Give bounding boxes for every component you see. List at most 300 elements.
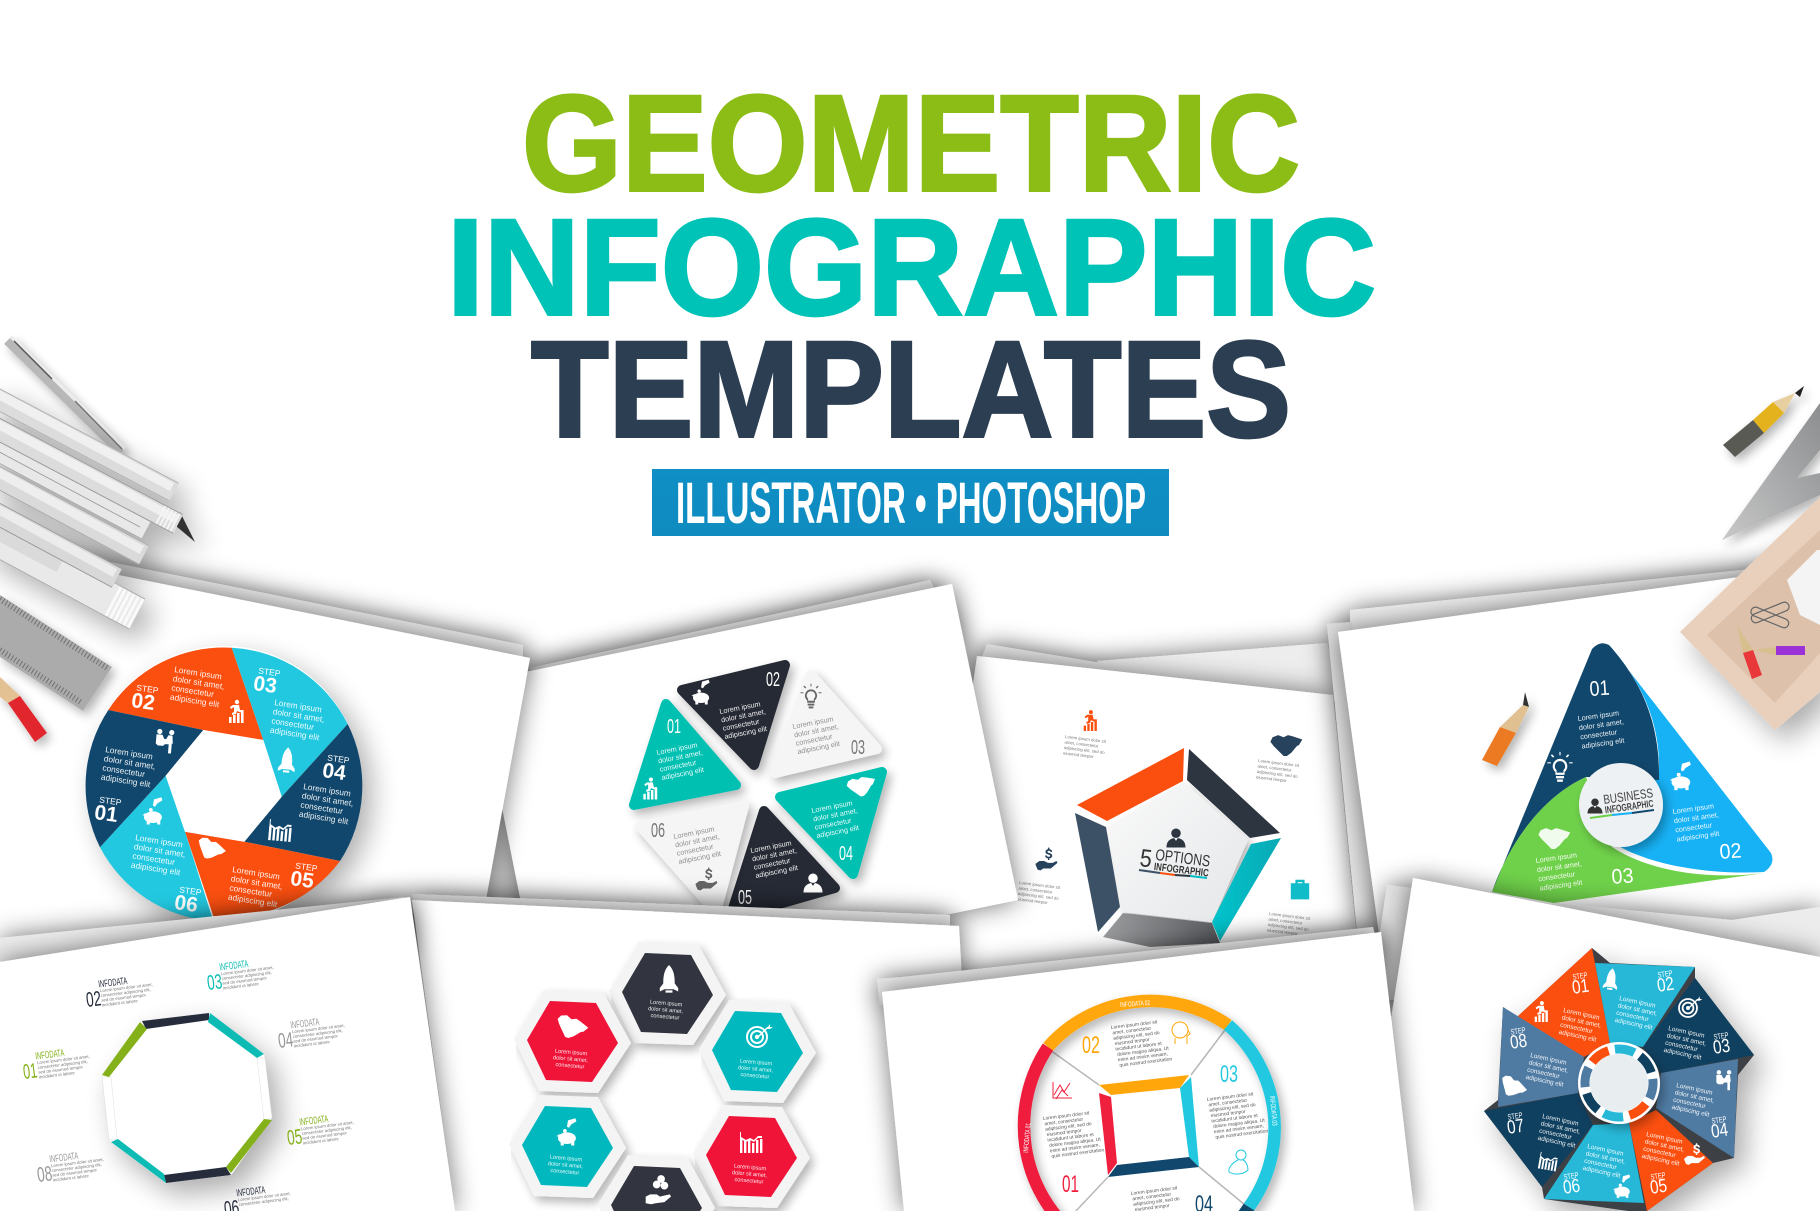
subtitle badge <box>652 469 1169 536</box>
text: note 3: amet, consectetur <box>1018 885 1053 895</box>
text: step 6: Lorem ipsum <box>673 824 715 841</box>
icon: handshake <box>846 775 878 799</box>
panel: six step ring infographic <box>86 646 362 921</box>
pentagon colour bar <box>1139 870 1207 878</box>
text: blade 3: consectetur <box>1665 1040 1699 1053</box>
blade 04 <box>1656 1059 1738 1158</box>
pentagon label: INFOGRAPHIC <box>1153 861 1210 880</box>
label 06: INFODATA <box>236 1185 266 1199</box>
label 05: 05 <box>286 1125 303 1150</box>
label 03: INFODATA <box>219 959 249 973</box>
text: step 6: consectetur <box>676 842 715 858</box>
step label 06: 06 <box>1562 1176 1581 1199</box>
text: note 4: Lorem ipsum dolor sit <box>1269 911 1311 921</box>
text: step 6: consectetur <box>132 850 176 867</box>
panel: circle template sheet <box>882 932 1414 1211</box>
icon: rocket <box>278 747 297 773</box>
arc label 03: INFODATA 03 <box>1268 1096 1278 1126</box>
blade 03 <box>1643 978 1754 1073</box>
text: top quadrant: dolore magna aliqua. Ut <box>1117 1046 1170 1058</box>
text: blade 5: consectetur <box>1643 1146 1677 1159</box>
arc cyan <box>1228 1025 1275 1207</box>
text: top quadrant: amet, consectetur <box>1112 1026 1152 1036</box>
text: blade 6: dolor sit amet, <box>1585 1150 1626 1166</box>
triangle 04 <box>780 772 882 874</box>
blade 02 <box>1595 963 1695 1047</box>
text: left quadrant: adipiscing elit, sed do <box>1045 1121 1092 1133</box>
step label 02: STEP <box>1657 969 1673 980</box>
segment teal upper right <box>208 1013 264 1058</box>
panel: octagon ring template sheet <box>0 897 455 1211</box>
text: step 1: Lorem ipsum <box>1577 708 1619 723</box>
step label 04 <box>321 752 350 785</box>
label 08: consectetur adipiscing elit, <box>51 1162 102 1173</box>
text: step 3: adipiscing elit <box>1539 878 1583 893</box>
ring soft shadow <box>102 1013 272 1183</box>
text: blade 8: consectetur <box>1527 1067 1561 1080</box>
step label 05: STEP <box>295 860 318 874</box>
label 04: incididunt ut labore <box>294 1039 331 1049</box>
icon: wooden tray <box>1680 497 1820 730</box>
text: note 2: adipiscing elit, sed do <box>1257 769 1299 779</box>
text: right quadrant: Lorem ipsum dolor sit <box>1207 1091 1254 1103</box>
text: step 2: consectetur <box>1675 820 1713 834</box>
pentagon orange segment <box>1077 748 1184 821</box>
step label 07: 07 <box>1506 1116 1525 1139</box>
hexagon left red: consectetur <box>555 1062 585 1071</box>
blade 08 <box>1498 1007 1584 1107</box>
text: step 6: adipiscing elit <box>678 849 722 866</box>
label 01: INFODATA <box>35 1048 65 1062</box>
hexagon left red <box>514 990 631 1093</box>
text: note 1: Lorem ipsum dolor sit <box>1065 734 1107 744</box>
hexagon bottom dark <box>598 1155 715 1211</box>
blade 06 <box>1544 1123 1644 1203</box>
step label 01: STEP <box>1572 971 1588 982</box>
icon: yellow pencil <box>1723 386 1804 457</box>
hexagon top dark: consectetur <box>650 1013 680 1022</box>
label 03: Lorem ipsum dolor sit amet, <box>221 965 274 976</box>
label 03: sed do eiusmod tempor <box>222 975 268 986</box>
step label 05 <box>289 860 318 893</box>
roll tip <box>176 512 195 542</box>
step number 02: 02 <box>1719 839 1742 864</box>
text: step 4: consectetur <box>300 799 344 816</box>
centre label bar <box>1590 810 1654 818</box>
title line: TEMPLATES: TEMPLATES <box>531 314 1291 466</box>
icon: two people <box>1716 1070 1731 1090</box>
step label 06 <box>1561 1171 1581 1199</box>
label 04: 04 <box>277 1028 295 1053</box>
text: top quadrant: eiusmod tempor <box>1115 1037 1150 1047</box>
segment navy bottom <box>164 1167 231 1183</box>
hexagon right teal <box>699 1000 816 1103</box>
arc navy <box>1215 1207 1249 1211</box>
step label 01: STEP <box>99 794 122 808</box>
step number 01: 01 <box>1589 677 1610 701</box>
step number 02: 02 <box>766 669 780 691</box>
text: right quadrant: adipiscing elit, sed do <box>1209 1102 1256 1114</box>
text: step 6: Lorem ipsum <box>135 832 184 849</box>
text: step 3: Lorem ipsum <box>274 697 323 714</box>
square orange bar <box>1099 1075 1189 1095</box>
triangle centre label: INFOGRAPHIC <box>1604 799 1654 816</box>
hexagon lower left teal: consectetur <box>550 1168 580 1177</box>
pentagon label <box>1138 844 1211 881</box>
ring segment 03 <box>232 648 348 797</box>
icon: rocket <box>1602 967 1620 991</box>
label 08: incididunt ut labore <box>53 1173 90 1183</box>
blades underlay <box>1484 948 1754 1211</box>
pentagon slate segment <box>1075 813 1120 932</box>
step label 06: STEP <box>1563 1171 1579 1182</box>
text: blade 1: dolor sit amet, <box>1561 1014 1602 1030</box>
text: blade 7: dolor sit amet, <box>1540 1120 1581 1136</box>
icon: red pencil <box>0 677 47 742</box>
text: step 1: adipiscing elit <box>100 772 152 789</box>
step label 02: STEP <box>136 682 159 696</box>
icon: handshake <box>1270 735 1302 756</box>
text: step 2: dolor sit amet, <box>172 673 225 691</box>
ring centre hole <box>166 730 282 842</box>
text: top quadrant: incididunt ut labore et <box>1115 1041 1163 1053</box>
panel: step ring template sheet <box>0 551 530 960</box>
label 02 <box>84 973 155 1012</box>
text: step 5: Lorem ipsum <box>232 864 281 881</box>
label 06 <box>222 1182 293 1211</box>
hexagon top dark <box>609 942 726 1045</box>
icon: light bulb <box>1547 752 1573 782</box>
text: right quadrant: enim ad minim veniam, <box>1214 1123 1264 1135</box>
text: blade 1: adipiscing elit <box>1558 1029 1597 1044</box>
text: step 5: dolor sit amet, <box>230 873 283 891</box>
roll 4 <box>0 469 144 555</box>
text: note 4: adipiscing elit, sed do <box>1268 922 1310 932</box>
text: note 3: Lorem ipsum dolor sit <box>1019 880 1061 890</box>
arc label 02: INFODATA 02 <box>1120 1000 1150 1009</box>
label 02: sed do eiusmod tempor <box>101 992 147 1003</box>
icon: handshake <box>193 835 228 865</box>
text: top quadrant: quis nostrud exercitation <box>1119 1056 1173 1069</box>
text: step 2: adipiscing elit <box>1676 829 1720 844</box>
triangle 02 <box>682 665 785 765</box>
step label 04: STEP <box>1711 1115 1727 1126</box>
triangle 05 <box>730 811 835 918</box>
step label 03: 03 <box>252 672 278 698</box>
pentagon dark segment <box>1187 749 1280 838</box>
hexagon lower left teal: dolor sit amet, <box>548 1161 584 1170</box>
text: right quadrant: amet, consectetur <box>1208 1098 1248 1108</box>
hub <box>1578 1042 1660 1124</box>
text: step 2: Lorem ipsum <box>1672 801 1714 816</box>
tray red pencil <box>1737 626 1762 679</box>
text: bottom quadrant: Lorem ipsum dolor sit <box>1131 1185 1178 1197</box>
text: step 2: consectetur <box>171 682 215 699</box>
text: step 1: Lorem ipsum <box>105 744 154 761</box>
blade 07 <box>1484 1093 1593 1187</box>
step number 05: 05 <box>738 887 752 909</box>
hexagon right teal: dolor sit amet, <box>738 1065 774 1074</box>
step label 06: 06 <box>173 891 199 917</box>
text: right quadrant: incididunt ut labore et <box>1211 1113 1259 1125</box>
icon: two people <box>155 729 175 754</box>
label 02: incididunt ut labore <box>102 998 139 1008</box>
text: right quadrant: dolore magna aliqua. Ut <box>1213 1118 1266 1130</box>
text: blade 1: consectetur <box>1560 1022 1594 1035</box>
ring segment 06 <box>100 776 213 921</box>
label 05: incididunt ut labore <box>303 1136 340 1146</box>
text: note 1: eiusmod tempor <box>1063 750 1095 759</box>
segment green upper left <box>102 1022 147 1077</box>
triangle blue segment <box>1609 645 1772 873</box>
text: left quadrant: eiusmod tempor <box>1047 1128 1082 1138</box>
panel: triangle template sheet <box>1338 566 1820 1000</box>
icon: target <box>1679 996 1702 1017</box>
segment navy top <box>142 1013 209 1029</box>
number 01: 01 <box>1062 1171 1079 1198</box>
step label 03: STEP <box>258 665 281 679</box>
step label 02 <box>1655 969 1675 997</box>
segment green lower right <box>226 1119 272 1173</box>
label 05: INFODATA <box>299 1114 329 1128</box>
text: blade 8: adipiscing elit <box>1525 1074 1564 1089</box>
step label 07: STEP <box>1507 1111 1523 1122</box>
icon: runner <box>1084 710 1097 731</box>
triangle centre disc <box>1579 763 1663 847</box>
text: step 4: dolor sit amet, <box>812 806 858 823</box>
hexagon right teal: Lorem ipsum <box>740 1059 773 1067</box>
blade 05 <box>1629 1110 1713 1211</box>
step label 05: 05 <box>289 867 316 893</box>
text: left quadrant: Lorem ipsum dolor sit <box>1043 1110 1090 1122</box>
text: left quadrant: dolore magna aliqua. Ut <box>1049 1137 1102 1149</box>
panel: hexagon template sheet <box>412 900 975 1211</box>
label 04: consectetur adipiscing elit, <box>292 1028 343 1039</box>
text: step 1: Lorem ipsum <box>656 740 698 757</box>
text: note 4: amet, consectetur <box>1268 916 1303 926</box>
text: blade 2: adipiscing elit <box>1614 1017 1653 1032</box>
text: step 3: consectetur <box>795 732 834 748</box>
hexagon lower right red: dolor sit amet, <box>732 1170 768 1179</box>
text: top quadrant: adipiscing elit, sed do <box>1113 1030 1160 1042</box>
text: step 1: adipiscing elit <box>1581 736 1625 751</box>
text: step 6: adipiscing elit <box>130 860 182 877</box>
label 04 <box>276 1014 347 1053</box>
text: note 3: adipiscing elit, sed do <box>1018 891 1060 901</box>
text: blade 3: Lorem ipsum <box>1668 1025 1705 1040</box>
text: blade 5: dolor sit amet, <box>1644 1138 1685 1154</box>
label 08: sed do eiusmod tempor <box>52 1167 98 1178</box>
title <box>447 68 1376 466</box>
text: step 1: consectetur <box>102 762 146 779</box>
hexagon top dark: Lorem ipsum <box>650 1000 683 1008</box>
label 06: consectetur adipiscing elit, <box>238 1196 289 1207</box>
text: step 5: dolor sit amet, <box>751 846 797 863</box>
panel: pentagon infographic <box>1017 710 1311 947</box>
text: step 5: Lorem ipsum <box>750 838 792 855</box>
step label 08: STEP <box>1510 1026 1526 1037</box>
icon: person <box>1166 828 1186 848</box>
triangle navy segment <box>1492 643 1659 892</box>
pentagon teal segment <box>1212 838 1281 941</box>
text: left quadrant: incididunt ut labore et <box>1047 1132 1095 1144</box>
label 02: Lorem ipsum dolor sit amet, <box>100 982 153 993</box>
text: step 1: adipiscing elit <box>661 765 705 782</box>
hexagon lower right red: consectetur <box>734 1177 764 1186</box>
roll 6 <box>0 530 137 614</box>
label 06: Lorem ipsum dolor sit amet, <box>238 1191 291 1202</box>
icon: chart outline <box>1053 1082 1072 1099</box>
text: step 3: consectetur <box>1538 869 1576 883</box>
arc label 01: INFODATA 01 <box>1023 1123 1033 1153</box>
text: blade 1: Lorem ipsum <box>1563 1007 1600 1022</box>
label 02: 02 <box>85 987 102 1012</box>
text: step 3: Lorem ipsum <box>792 714 834 731</box>
roll 1 <box>0 391 174 492</box>
step label 03: 03 <box>1712 1036 1731 1059</box>
back sheets behind circle template <box>877 927 1381 1010</box>
text: step 5: adipiscing elit <box>227 892 279 909</box>
step label 03 <box>1711 1031 1731 1059</box>
step label 03: STEP <box>1713 1031 1729 1042</box>
icon: money hand <box>1036 848 1057 870</box>
icon: head outline <box>1172 1022 1190 1044</box>
icon: piggy bank <box>1670 762 1691 790</box>
step label 01 <box>93 794 122 827</box>
text: blade 2: consectetur <box>1616 1010 1650 1023</box>
icon: set square <box>1722 403 1820 540</box>
icon: silver pen <box>8 337 125 452</box>
step label 02: 02 <box>1656 974 1675 997</box>
text: step 4: adipiscing elit <box>816 823 860 840</box>
back sheet behind step ring template <box>0 540 523 670</box>
step label 05 <box>1648 1171 1668 1199</box>
text: left quadrant: quis nostrud exercitation <box>1051 1147 1105 1160</box>
spokes <box>1050 1030 1245 1211</box>
step label 04: 04 <box>321 759 348 785</box>
text: step 4: Lorem ipsum <box>811 798 853 815</box>
label 03: consectetur adipiscing elit, <box>221 970 272 981</box>
step number 06: 06 <box>651 820 665 842</box>
label 05: Lorem ipsum dolor sit amet, <box>301 1120 354 1131</box>
label 03: 03 <box>206 970 223 995</box>
label 04: Lorem ipsum dolor sit amet, <box>292 1023 345 1034</box>
icon: light bulb <box>801 684 821 708</box>
text: blade 4: Lorem ipsum <box>1676 1082 1713 1097</box>
text: step 3: consectetur <box>271 715 315 732</box>
text: step 1: dolor sit amet, <box>103 753 156 771</box>
step label 07 <box>1505 1111 1525 1139</box>
icon: handshake <box>1496 1073 1529 1102</box>
roll 5 <box>0 506 117 578</box>
wedge between left sheets <box>484 795 526 904</box>
icon: steel ruler <box>0 595 112 711</box>
text: step 4: Lorem ipsum <box>303 781 352 798</box>
icon: outline figure <box>1229 1150 1248 1174</box>
panel: hexagon ring infographic <box>509 942 816 1211</box>
tray inner <box>1707 530 1820 703</box>
step label 01 <box>1570 971 1590 999</box>
hexagon lower right red: Lorem ipsum <box>734 1164 767 1172</box>
text: step 3: Lorem ipsum <box>1535 850 1577 865</box>
label 05: sed do eiusmod tempor <box>302 1130 348 1141</box>
text: right quadrant: quis nostrud exercitation <box>1215 1128 1269 1141</box>
icon: bar chart <box>268 819 292 842</box>
text: blade 6: consectetur <box>1584 1158 1618 1171</box>
triangle 03 <box>775 675 877 773</box>
icon: person <box>1588 798 1602 814</box>
ring segment 04 <box>244 724 362 861</box>
step label 04: 04 <box>1710 1120 1730 1143</box>
step label 05: 05 <box>1649 1176 1668 1199</box>
text: step 1: consectetur <box>659 758 698 774</box>
step number 01: 01 <box>667 716 681 738</box>
text: step 3: dolor sit amet, <box>1536 859 1582 874</box>
text: blade 4: adipiscing elit <box>1671 1104 1710 1119</box>
ring segment 05 <box>185 832 340 917</box>
step label 03 <box>252 665 281 698</box>
text: blade 6: adipiscing elit <box>1582 1165 1621 1180</box>
label 03: incididunt ut labore <box>223 981 260 991</box>
panel: octagon ring infographic <box>21 956 356 1211</box>
title line: INFOGRAPHIC: INFOGRAPHIC <box>447 192 1376 344</box>
pentagon grey segment <box>1103 913 1220 947</box>
panel: octagon blades template sheet <box>1361 878 1820 1211</box>
square red bar <box>1099 1093 1117 1175</box>
label 08: 08 <box>36 1162 53 1187</box>
back sheets behind pentagon template <box>977 643 1345 720</box>
triangle centre label: BUSINESS <box>1602 785 1654 807</box>
roll 3 <box>0 447 146 530</box>
text: note 3: eiusmod tempor <box>1017 896 1049 905</box>
label 01: consectetur adipiscing elit, <box>37 1059 88 1070</box>
text: blade 8: Lorem ipsum <box>1530 1052 1567 1067</box>
text: blade 6: Lorem ipsum <box>1587 1143 1624 1158</box>
step label 08 <box>1508 1026 1528 1054</box>
icon: runner <box>229 700 244 723</box>
hexagon left red: Lorem ipsum <box>555 1049 588 1057</box>
text: blade 7: Lorem ipsum <box>1542 1113 1579 1128</box>
text: step 3: adipiscing elit <box>269 725 321 742</box>
icon: piggy bank <box>1613 1174 1630 1198</box>
title line: GEOMETRIC: GEOMETRIC <box>522 68 1300 220</box>
text: blade 4: consectetur <box>1673 1097 1707 1110</box>
segment teal lower left <box>111 1139 166 1183</box>
text: note 1: adipiscing elit, sed do <box>1064 745 1106 755</box>
text: left quadrant: enim ad minim veniam, <box>1050 1142 1100 1154</box>
pentagon centre <box>1107 782 1248 922</box>
text: step 4: adipiscing elit <box>298 809 350 826</box>
hexagon top dark: dolor sit amet, <box>648 1006 684 1015</box>
text: right quadrant: eiusmod tempor <box>1211 1109 1246 1119</box>
text: note 1: amet, consectetur <box>1064 739 1099 749</box>
text: left quadrant: amet, consectetur <box>1044 1117 1084 1127</box>
icon: handshake <box>1538 828 1570 849</box>
text: step 6: dolor sit amet, <box>133 841 186 859</box>
text: step 1: consectetur <box>1580 727 1618 741</box>
icon: money hand <box>1684 1143 1705 1165</box>
text: step 1: dolor sit amet, <box>1578 717 1624 732</box>
step label 02 <box>130 682 159 715</box>
text: blade 3: adipiscing elit <box>1663 1047 1702 1062</box>
tray contents <box>1707 530 1820 703</box>
step label 01: 01 <box>1571 976 1590 999</box>
text: step 2: adipiscing elit <box>724 724 768 741</box>
text: blade 8: dolor sit amet, <box>1528 1059 1569 1075</box>
triangle 06 <box>640 806 744 912</box>
label 01: sed do eiusmod tempor <box>38 1064 84 1075</box>
panel: eight blade octagon infographic <box>1484 948 1754 1211</box>
